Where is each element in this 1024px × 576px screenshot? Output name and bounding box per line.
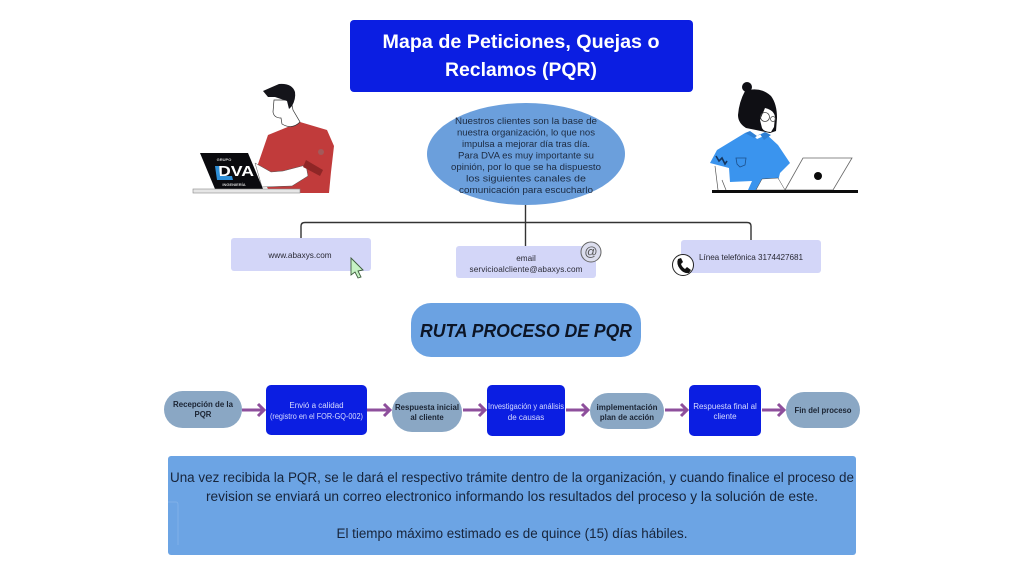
title: Mapa de Peticiones, Quejas o xyxy=(382,31,660,53)
channel: phone xyxy=(681,240,821,273)
channel: phone: Línea telefónica 3174427681 xyxy=(699,253,803,262)
closing note panel: El tiempo máximo estimado es de quince (15) días hábiles. xyxy=(336,526,688,541)
heading: ruta proceso: RUTA PROCESO DE PQR xyxy=(420,321,632,341)
channel: email: servicioalcliente@abaxys.com xyxy=(470,265,583,274)
icon: phone xyxy=(672,254,694,276)
intro ellipse: opinión, por lo que se ha dispuesto xyxy=(451,162,601,173)
process flow xyxy=(164,385,860,436)
step: implementación: plan de acción xyxy=(600,413,654,422)
step: implementación xyxy=(590,393,664,429)
arrow xyxy=(762,404,784,416)
channel: email xyxy=(456,246,596,278)
icon: cursor arrow xyxy=(351,258,363,278)
icon: at sign: @ xyxy=(584,244,598,259)
arrow xyxy=(566,404,588,416)
icon: at sign xyxy=(581,242,601,262)
closing note panel: Una vez recibida la PQR, se le dará el respectivo trámite dentro de la organización, y cuando finalice el proceso de xyxy=(170,470,854,485)
arrow xyxy=(242,404,264,416)
laptop xyxy=(785,158,852,190)
intro ellipse: impulsa a mejorar día tras día. xyxy=(462,139,590,150)
intro ellipse: Nuestros clientes son la base de xyxy=(455,116,597,127)
step: respuesta inicial: al cliente xyxy=(410,413,444,422)
step: envío a calidad: Envió a calidad xyxy=(289,401,344,410)
intro ellipse: Para DVA es muy importante su xyxy=(458,150,594,162)
intro ellipse: comunicación para escucharlo xyxy=(459,185,593,196)
step: recepción: PQR xyxy=(195,410,212,419)
heading: ruta proceso xyxy=(411,303,641,357)
step: recepción: Recepción de la xyxy=(173,400,234,409)
step: implementación: implementación xyxy=(596,403,658,412)
step: recepción xyxy=(164,391,242,428)
connector lines xyxy=(301,205,751,247)
illustration: woman with laptop xyxy=(710,82,858,193)
arrow xyxy=(367,404,390,416)
intro ellipse: los siguientes canales de xyxy=(466,174,586,184)
intro ellipse xyxy=(427,103,625,205)
laptop with logo: DVA xyxy=(218,163,254,180)
step: envío a calidad: (registro en el FOR-GQ-002) xyxy=(270,412,363,421)
intro ellipse: nuestra organización, lo que nos xyxy=(457,128,595,138)
step: respuesta inicial xyxy=(392,392,462,432)
channel: website xyxy=(231,238,371,271)
arrow xyxy=(463,404,485,416)
laptop with logo: GRUPO xyxy=(217,157,231,162)
closing note panel xyxy=(168,456,856,555)
channel: email: email xyxy=(516,254,536,263)
step: investigación xyxy=(487,385,565,436)
step: investigación: de causas xyxy=(508,413,544,422)
step: respuesta final: Respuesta final al xyxy=(693,402,757,411)
laptop with logo xyxy=(193,153,300,193)
title: Reclamos (PQR) xyxy=(445,59,597,81)
closing note panel: revision se enviará un correo electronico informando los resultados del proceso y la solución de este. xyxy=(206,489,818,504)
step: respuesta final: cliente xyxy=(713,412,737,421)
step: investigación: Investigación y análisis xyxy=(488,402,564,411)
laptop with logo: INGENIERÍA xyxy=(222,182,246,187)
illustration: man with DVA laptop xyxy=(193,84,334,193)
step: envío a calidad xyxy=(266,385,367,435)
arrow xyxy=(665,404,687,416)
channel: website: www.abaxys.com xyxy=(267,251,332,260)
step: respuesta inicial: Respuesta inicial xyxy=(395,403,459,412)
step: fin: Fin del proceso xyxy=(794,406,852,415)
step: fin xyxy=(786,392,860,428)
title xyxy=(350,20,693,92)
step: respuesta final xyxy=(689,385,761,436)
